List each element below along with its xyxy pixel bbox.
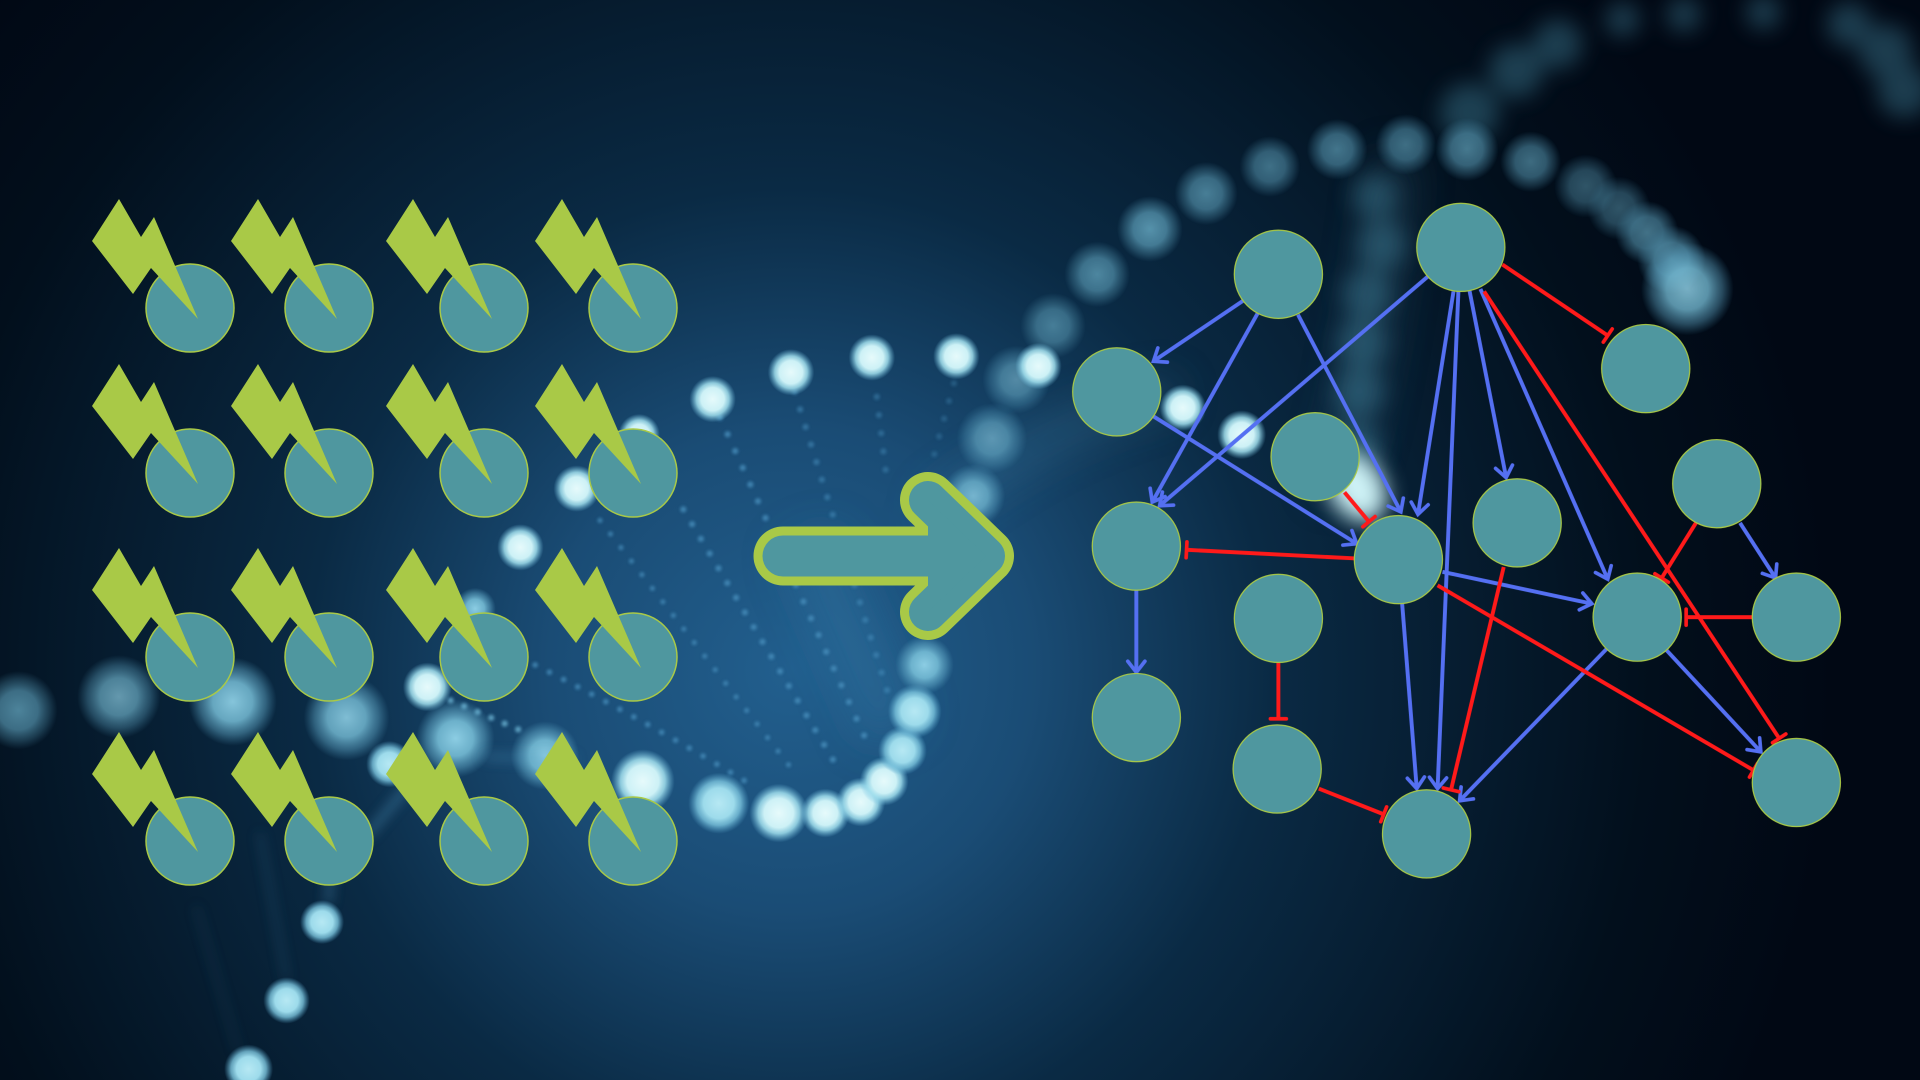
gene regulatory network [1073,203,1840,878]
perturbed node r1 c4 [535,199,677,352]
perturbed node r4 c3 [386,732,528,885]
perturbed node r3 c3 [386,548,528,701]
perturbed node r2 c4 [535,364,677,517]
large bright glow behind network [1315,442,1398,533]
perturbed node r4 c1 [92,732,234,885]
perturbed node r1 c2 [231,199,373,352]
arrow: perturbations to network [783,500,986,612]
perturbed node r1 c3 [386,199,528,352]
network nodes [1073,203,1840,878]
perturbed node r2 c2 [231,364,373,517]
perturbed node r4 c2 [231,732,373,885]
upper blurred strand [942,114,1734,528]
faint connecting lines [196,757,576,1053]
perturbed node r2 c1 [92,364,234,517]
soft glow bands [808,159,1396,735]
perturbed node r2 c3 [386,364,528,517]
bright helix dots [224,333,1266,1080]
far strand, faint top right [1332,0,1920,471]
perturbed node r3 c2 [231,548,373,701]
perturbed node r4 c4 [535,732,677,885]
activation edges [1136,276,1776,801]
perturbed node r1 c1 [92,199,234,352]
left blurred strand [0,655,675,813]
dotted rungs [451,383,954,784]
inhibition edges [1187,264,1779,814]
perturbed node r3 c4 [535,548,677,701]
perturbed nodes grid [92,199,677,885]
perturbed node r3 c1 [92,548,234,701]
